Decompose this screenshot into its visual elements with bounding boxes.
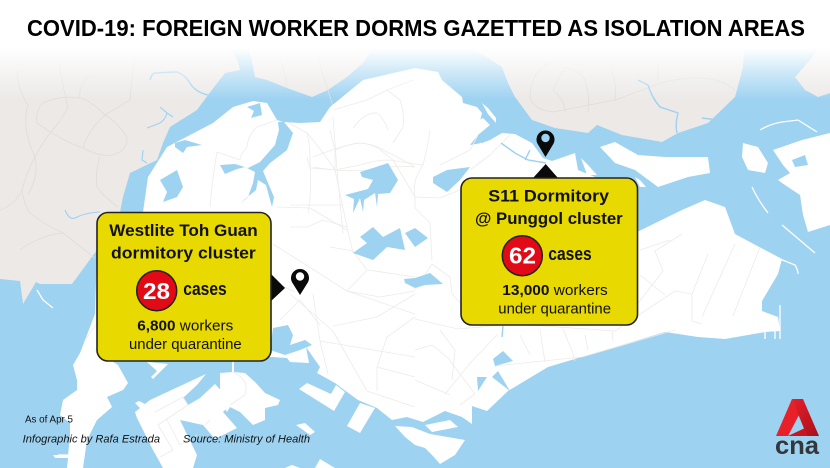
callout arrow xyxy=(270,273,285,302)
pin: Toh Guan location xyxy=(291,269,309,295)
Johor rivers xyxy=(65,72,720,218)
pin: Punggol location xyxy=(536,131,554,157)
credit: Infographic by Rafa Estrada xyxy=(23,433,160,445)
workers under quarantine: under quarantine xyxy=(498,300,611,317)
cases label: cases xyxy=(183,279,227,299)
islands xyxy=(135,103,830,468)
case count badge xyxy=(137,271,177,311)
top white fade xyxy=(0,0,830,100)
land: Johor xyxy=(0,30,830,304)
workers under quarantine: under quarantine xyxy=(129,336,242,353)
cases label: cases xyxy=(548,244,592,264)
callout arrow xyxy=(533,164,558,178)
white coastal lines xyxy=(37,120,817,455)
callout heading xyxy=(109,222,258,262)
logo: CNA: cna xyxy=(775,432,820,460)
reservoirs and water bodies xyxy=(160,103,808,391)
date note: As of Apr 5 xyxy=(25,413,73,425)
Singapore roads xyxy=(85,80,760,457)
callout heading: dormitory cluster xyxy=(111,244,256,262)
callout: S11 Dormitory xyxy=(461,164,638,325)
callout box xyxy=(461,178,638,325)
workers under quarantine: 6,800 workers xyxy=(137,318,233,335)
callout: Westlite Toh Guan xyxy=(97,212,285,361)
workers under quarantine: 13,000 workers xyxy=(502,282,608,299)
Johor roads xyxy=(0,50,735,258)
case count badge xyxy=(502,236,542,276)
callout heading: Westlite Toh Guan xyxy=(109,222,258,240)
callout heading: @ Punggol cluster xyxy=(475,210,623,228)
callout heading: S11 Dormitory xyxy=(488,188,610,206)
workers under quarantine xyxy=(498,282,611,317)
title: COVID-19: FOREIGN WORKER DORMS GAZETTED AS ISOLATION AREAS xyxy=(27,15,805,41)
case count badge: 28 xyxy=(143,278,170,304)
logo: CNA xyxy=(775,399,820,460)
source: Source: Ministry of Health xyxy=(183,433,310,445)
land: Singapore main island xyxy=(53,68,782,468)
callout heading xyxy=(475,188,623,228)
workers under quarantine xyxy=(129,318,242,353)
callout box xyxy=(97,212,271,361)
case count badge: 62 xyxy=(509,242,536,268)
